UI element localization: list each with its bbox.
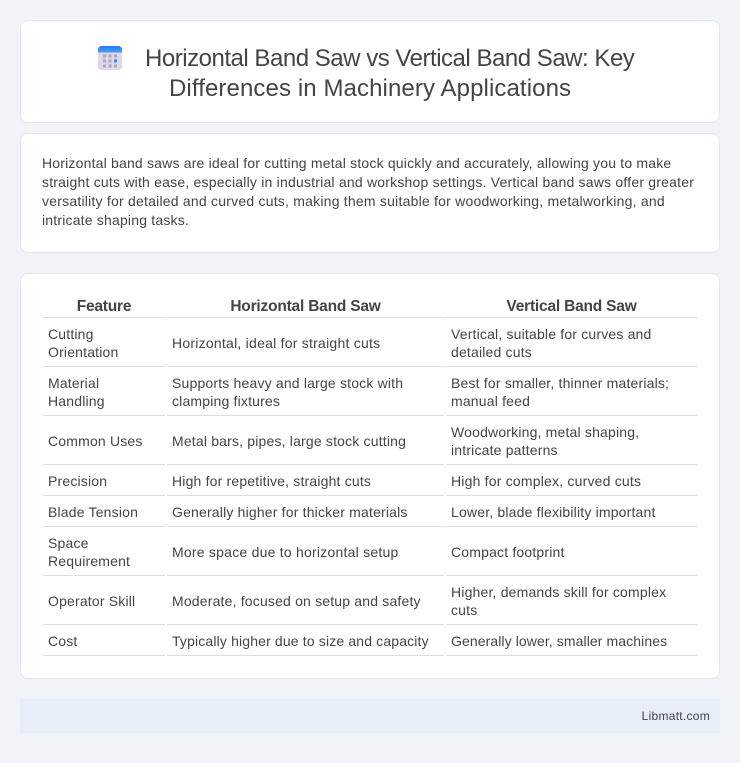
row: cost: Generally lower, smaller machines: [451, 633, 667, 649]
row: operator skill: Moderate, focused on setup and safety: [172, 593, 421, 609]
panel: title card: [20, 20, 720, 123]
row: precision: High for complex, curved cuts: [451, 473, 641, 489]
row: space requirement: [48, 535, 565, 569]
row: space requirement: Requirement: [48, 553, 130, 569]
text block: introduction: versatility for detailed and curved cuts, making them suitable for woodworking, metalworking, and: [42, 193, 665, 209]
row: operator skill: Higher, demands skill for complex: [451, 584, 666, 600]
icon: calendar: [98, 46, 122, 70]
row: material handling: clamping fixtures: [172, 393, 280, 409]
row: material handling: Supports heavy and large stock with: [172, 375, 403, 391]
row: cost: [48, 633, 667, 649]
row: common uses: Woodworking, metal shaping,: [451, 424, 639, 440]
row: cost: Cost: [48, 633, 78, 649]
title: Differences in Machinery Applications: [169, 75, 571, 102]
row: blade tension: Generally higher for thicker materials: [172, 504, 408, 520]
row: space requirement: More space due to horizontal setup: [172, 544, 399, 560]
row: space requirement: Compact footprint: [451, 544, 565, 560]
table header row: Vertical Band Saw: [506, 298, 637, 315]
footer bar: [20, 699, 720, 733]
table header row: Horizontal Band Saw: [230, 298, 381, 315]
row: material handling: Material: [48, 375, 99, 391]
row: common uses: [48, 424, 639, 458]
footer text: Libmatt.com: [642, 709, 710, 723]
row: precision: High for repetitive, straight cuts: [172, 473, 371, 489]
row: blade tension: Blade Tension: [48, 504, 138, 520]
row: material handling: Handling: [48, 393, 105, 409]
row: cutting orientation: Vertical, suitable for curves and: [451, 326, 651, 342]
row: cutting orientation: Cutting: [48, 326, 94, 342]
table header row: [77, 298, 637, 315]
row: material handling: manual feed: [451, 393, 530, 409]
panel: comparison table: [20, 273, 720, 679]
row: common uses: intricate patterns: [451, 442, 558, 458]
row: common uses: Common Uses: [48, 433, 143, 449]
title: Horizontal Band Saw vs Vertical Band Saw: Key: [145, 45, 634, 72]
row: cutting orientation: Orientation: [48, 344, 118, 360]
comparison table: [43, 298, 697, 656]
panel: introduction: [20, 133, 720, 253]
row: precision: Precision: [48, 473, 107, 489]
row: cutting orientation: detailed cuts: [451, 344, 532, 360]
text block: introduction: [42, 155, 694, 228]
row: operator skill: cuts: [451, 602, 477, 618]
row: operator skill: Operator Skill: [48, 593, 135, 609]
row: space requirement: Space: [48, 535, 89, 551]
row: blade tension: Lower, blade flexibility important: [451, 504, 656, 520]
row: material handling: [48, 375, 669, 409]
row: precision: [48, 473, 641, 489]
row: cutting orientation: Horizontal, ideal for straight cuts: [172, 335, 380, 351]
row: common uses: Metal bars, pipes, large stock cutting: [172, 433, 406, 449]
row: cutting orientation: [48, 326, 651, 360]
title: [145, 45, 635, 102]
row: blade tension: [48, 504, 656, 520]
row: operator skill: [48, 584, 666, 618]
row: cost: Typically higher due to size and capacity: [172, 633, 429, 649]
row: material handling: Best for smaller, thinner materials;: [451, 375, 669, 391]
text block: introduction: straight cuts with ease, especially in industrial and workshop settings. Vertical band saws offer greater: [42, 174, 694, 190]
table header row: Feature: [77, 298, 131, 315]
text block: introduction: Horizontal band saws are ideal for cutting metal stock quickly and accurately, allowing you to make: [42, 155, 671, 171]
text block: introduction: intricate shaping tasks.: [42, 212, 189, 228]
